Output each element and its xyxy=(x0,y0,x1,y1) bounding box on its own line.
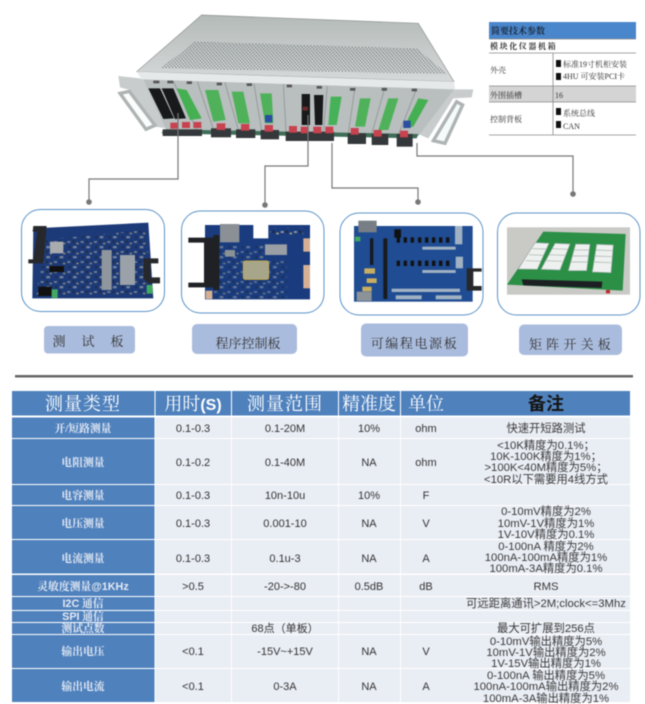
spec row: slots xyxy=(489,86,636,102)
spec subtitle: 模块化仪器机箱 xyxy=(490,41,557,51)
label: matrix board: 矩阵开关板 xyxy=(529,337,615,352)
label: control board xyxy=(192,324,297,354)
row: current: 电流测量 xyxy=(61,551,105,565)
front lip xyxy=(137,72,455,89)
spec row: backplane xyxy=(490,108,595,131)
row: capacitance: F xyxy=(423,490,430,502)
base rail xyxy=(162,129,418,138)
row: open/short: 0.1-20M xyxy=(265,423,305,435)
row: current: 100mA-3A精度为0.1% xyxy=(489,561,603,575)
row: resistance: >100K<40M精度为5%； xyxy=(484,460,608,474)
connector line: control board xyxy=(262,115,308,208)
row: current: 100nA-100mA精度为1% xyxy=(485,550,607,564)
chassis photo xyxy=(118,15,473,147)
connector line: test board xyxy=(86,113,178,205)
row: sensitivity: >0.5 xyxy=(182,581,204,593)
panel: matrix switch board xyxy=(498,213,640,315)
row: output current: <0.1 xyxy=(182,681,204,693)
row: resistance: NA xyxy=(361,457,377,469)
table header: 精准度 xyxy=(342,394,396,414)
row: output current: 0-100nA 输出精度为5% xyxy=(487,668,605,682)
row: capacitance: 0.1-0.3 xyxy=(176,490,210,502)
row: output current: 0-3A xyxy=(273,681,297,693)
row: resistance: 0.1-40M xyxy=(265,457,305,469)
row: output voltage: -15V~+15V xyxy=(257,646,313,658)
row: voltage: 0-10mV精度为2% xyxy=(501,504,591,518)
row: voltage xyxy=(61,504,594,541)
row: current: 0.1-0.3 xyxy=(176,553,210,565)
row: output voltage: <0.1 xyxy=(182,646,204,658)
table header: 备注 xyxy=(528,394,564,414)
row: test points: 最大可扩展到256点 xyxy=(497,621,595,635)
row: capacitance: 10% xyxy=(358,490,380,502)
label: control board: 程序控制板 xyxy=(215,336,281,351)
row: resistance xyxy=(61,438,608,486)
chassis top plate xyxy=(137,15,454,82)
table header: 单位 xyxy=(408,394,444,414)
left handle xyxy=(120,91,155,129)
table header: 测量范围 xyxy=(247,394,323,414)
row: output voltage: 10mV-1V输出精度为2% xyxy=(486,645,606,659)
row: sensitivity: 灵敏度测量@1KHz xyxy=(37,579,129,593)
spec row: backplane: 控制背板 xyxy=(490,114,522,124)
divider xyxy=(15,375,633,378)
row: I2C: I2C 通信 xyxy=(62,596,104,610)
table header: 用时(S) xyxy=(164,394,222,414)
row: voltage: V xyxy=(422,518,430,530)
row: test points: 测试点数 xyxy=(61,621,105,635)
row: output voltage: 输出电压 xyxy=(61,644,105,658)
spec heading xyxy=(489,22,636,39)
row: output current: 100nA-100mA输出精度为2% xyxy=(473,679,619,693)
panel: test board xyxy=(22,210,164,312)
row: open/short: 开/短路测量 xyxy=(55,421,112,435)
row: current xyxy=(61,539,607,575)
label: power board: 可编程电源板 xyxy=(371,336,458,351)
row: sensitivity: RMS xyxy=(533,581,559,593)
left ear xyxy=(118,76,167,128)
row backgrounds xyxy=(12,417,630,702)
row: voltage: 0.1-0.3 xyxy=(176,518,210,530)
row: sensitivity: 0.5dB xyxy=(355,581,383,593)
test board image xyxy=(28,223,160,298)
row: sensitivity: dB xyxy=(419,581,433,593)
row: voltage: 10mV-1V精度为1% xyxy=(498,516,594,530)
row: voltage: 1V-10V精度为0.1% xyxy=(498,527,594,541)
row: open/short: 快速开短路测试 xyxy=(506,421,586,435)
row: sensitivity: -20->-80 xyxy=(264,581,306,593)
spec table xyxy=(489,22,636,135)
label: test board xyxy=(44,326,140,354)
row: current: NA xyxy=(361,553,377,565)
row: output voltage xyxy=(61,634,606,670)
spec row: backplane: CAN xyxy=(563,122,580,131)
connector line: matrix board xyxy=(417,143,576,197)
row: sensitivity xyxy=(37,579,559,593)
spec row: shell: 标准19寸机柜安装 xyxy=(563,59,627,69)
card dividers and modules xyxy=(148,81,428,135)
row: I2C xyxy=(62,596,626,610)
row: output current: NA xyxy=(361,681,377,693)
label: test board: 测试板 xyxy=(52,334,140,349)
right ear xyxy=(418,89,473,138)
power board image xyxy=(354,221,482,302)
panel: power board xyxy=(340,213,483,315)
row: test points: 68点（单板） xyxy=(251,621,319,635)
card ejector handles xyxy=(163,122,413,147)
row: test points xyxy=(61,621,595,635)
spec row: slots: 16 xyxy=(555,91,563,100)
row: current: 0.1u-3 xyxy=(269,553,301,565)
panel: control board xyxy=(182,211,324,313)
row: current: 0-100nA 精度为2% xyxy=(498,539,594,553)
row: output voltage: NA xyxy=(361,646,377,658)
row: resistance: 电阻测量 xyxy=(61,455,105,469)
row: resistance: <10R以下需要用4线方式 xyxy=(484,472,608,486)
label: power board xyxy=(361,324,468,356)
row: resistance: <10K精度为0.1%； xyxy=(497,438,595,452)
front panel xyxy=(143,79,454,136)
right handle xyxy=(433,102,463,143)
spec row: shell: 外壳 xyxy=(490,65,506,75)
spec heading: 简要技术参数 xyxy=(491,25,545,36)
row: voltage: 电压测量 xyxy=(61,516,105,530)
row: open/short: ohm xyxy=(415,423,437,435)
row: capacitance: 10n-10u xyxy=(265,490,305,502)
spec row: slots: 外围插槽 xyxy=(490,90,522,100)
connector line: power board xyxy=(332,143,421,205)
spec row: backplane: 系统总线 xyxy=(563,108,595,118)
row: resistance: ohm xyxy=(415,457,437,469)
row: output voltage: 0-10mV输出精度为5% xyxy=(490,634,602,648)
row: output current: A xyxy=(422,681,430,693)
row: resistance: 0.1-0.2 xyxy=(176,457,210,469)
row: SPI: SPI 通信 xyxy=(62,609,104,623)
table header xyxy=(12,391,630,416)
row: I2C: 可远距离通讯>2M;clock<=3Mhz xyxy=(466,596,626,610)
row: open/short xyxy=(55,421,586,435)
perforated area xyxy=(160,42,447,74)
row: output current xyxy=(61,668,619,704)
spec row: shell xyxy=(490,59,627,81)
row: voltage: NA xyxy=(361,518,377,530)
table header: 测量类型 xyxy=(45,394,121,414)
row: current: A xyxy=(422,553,430,565)
matrix board image xyxy=(507,227,630,295)
row: output voltage: 1V-15V输出精度为1% xyxy=(491,656,601,670)
label: matrix board xyxy=(519,324,622,355)
row: capacitance: 电容测量 xyxy=(61,488,105,502)
row: output current: 输出电流 xyxy=(61,679,105,693)
row: resistance: 10K-100K精度为1%； xyxy=(490,449,602,463)
row: output voltage: V xyxy=(422,646,430,658)
row: open/short: 10% xyxy=(358,423,380,435)
row: capacitance xyxy=(61,488,430,502)
row: voltage: 0.001-10 xyxy=(263,518,307,530)
spec row: shell: 4HU 可安装PCI卡 xyxy=(563,71,625,81)
measurement table xyxy=(12,391,630,704)
row: open/short: 0.1-0.3 xyxy=(176,423,210,435)
control board image xyxy=(188,224,310,299)
